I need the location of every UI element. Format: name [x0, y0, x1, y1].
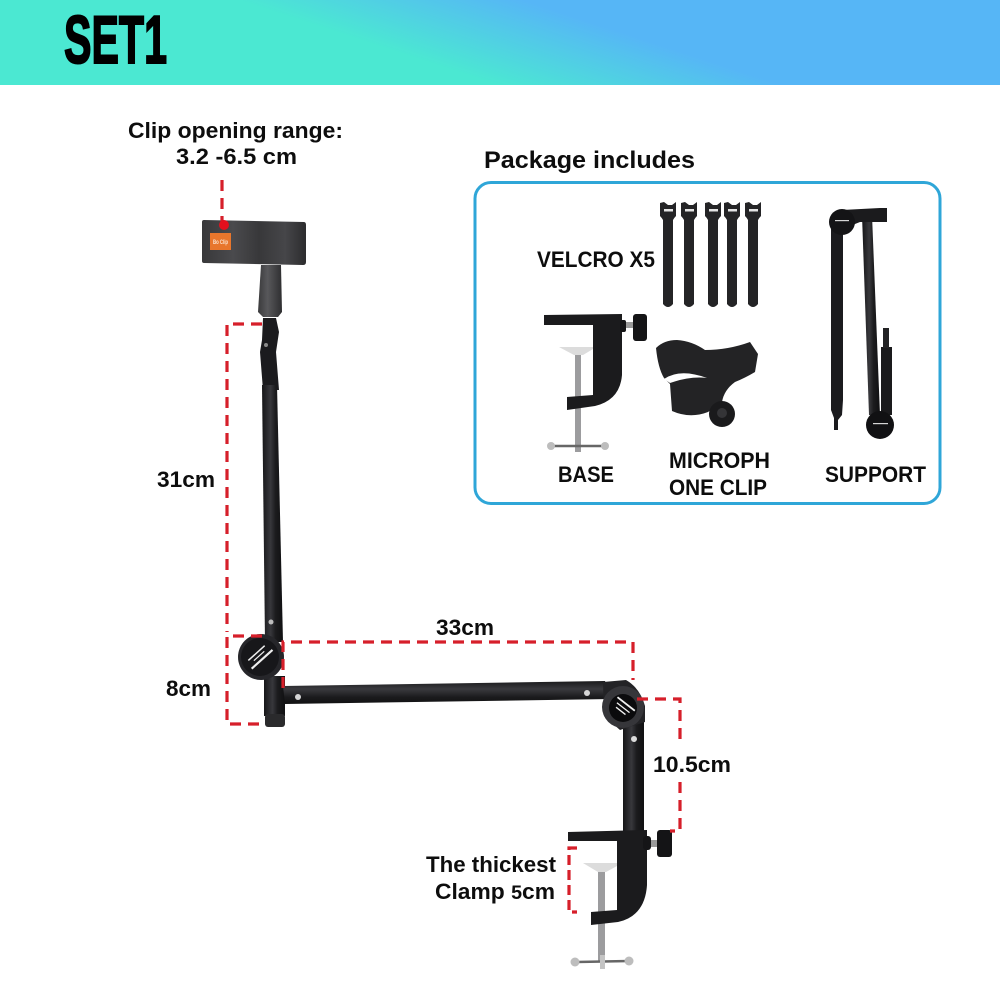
- label: 33cm: 33cm: [436, 615, 494, 640]
- heading: package includes: Package includes: [484, 147, 695, 174]
- icon: base clamp: [544, 314, 647, 452]
- title: SET1: SET1: [64, 2, 167, 78]
- label: clip opening range: Clip opening range:: [128, 118, 343, 143]
- horizontal arm: [283, 681, 612, 704]
- label: thickest clamp: [426, 852, 557, 904]
- vertical lower arm: [623, 718, 644, 834]
- label: thickest clamp: Clamp 5cm: [435, 879, 555, 904]
- icon: velcro straps: [660, 202, 761, 307]
- label: base: BASE: [558, 462, 614, 487]
- icon: microphone clip: [656, 340, 758, 427]
- lower stub under left knob: [264, 676, 285, 727]
- right joint knob: [602, 680, 645, 730]
- upper arm tube: [260, 318, 283, 642]
- label: clip opening range: 3.2 -6.5 cm: [176, 144, 297, 169]
- dimension: clip opening: [219, 180, 229, 230]
- dimension: 10.5cm: [637, 699, 680, 831]
- label: thickest clamp: The thickest: [426, 852, 557, 877]
- desk clamp: [568, 830, 672, 969]
- label: microphone clip: ONE CLIP: [669, 475, 767, 500]
- dimension: clamp thickness: [569, 848, 577, 912]
- label: clip opening range: [128, 118, 343, 169]
- icon: support arm: [829, 208, 894, 439]
- label: support: SUPPORT: [825, 462, 927, 487]
- dimension: 31cm: [227, 324, 262, 632]
- label: microphone clip: [669, 448, 770, 500]
- microphone clip holder: [202, 220, 306, 317]
- label: 8cm: 8cm: [166, 676, 211, 701]
- label: 31cm: 31cm: [157, 467, 215, 492]
- label: microphone clip: MICROPH: [669, 448, 770, 473]
- microphone clip holder: Bo Clip: [213, 240, 228, 246]
- red dimension lines: [219, 180, 680, 912]
- label: 10.5cm: 10.5cm: [653, 752, 731, 777]
- dimension: 8cm: [227, 636, 265, 724]
- left joint knob: [238, 634, 284, 680]
- dimension: 33cm: [283, 642, 633, 688]
- boom arm product image: [202, 220, 672, 969]
- label: velcro: VELCRO X5: [537, 247, 655, 272]
- panel: package includes: [475, 182, 940, 504]
- header banner: [0, 0, 1000, 85]
